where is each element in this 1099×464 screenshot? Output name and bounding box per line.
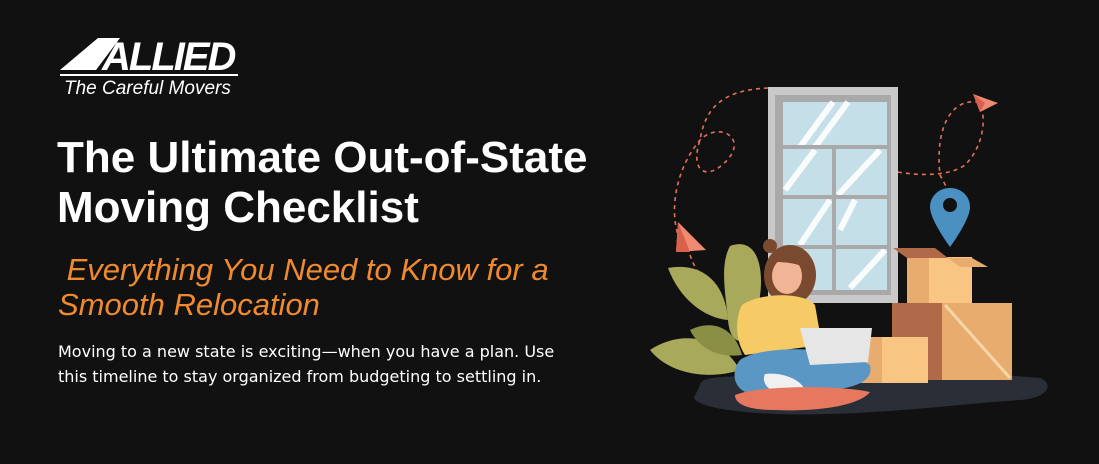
window [768, 87, 898, 303]
intro text: Moving to a new state is exciting—when you have a plan. Use [58, 342, 554, 361]
dashed flight paths [674, 88, 983, 290]
paper plane right [973, 94, 998, 112]
title: Moving Checklist [57, 183, 419, 232]
logo [60, 35, 238, 98]
subtitle [58, 252, 549, 322]
title: The Ultimate Out-of-State [57, 133, 587, 182]
boxes [857, 248, 1012, 383]
intro text [58, 342, 554, 386]
plant leaves [650, 244, 761, 375]
subtitle: Everything You Need to Know for a [67, 252, 549, 287]
logo mark swoosh [60, 38, 120, 70]
logo wordmark: ALLIED [101, 35, 236, 79]
title [57, 133, 587, 232]
location pin [930, 188, 970, 247]
subtitle: Smooth Relocation [58, 287, 320, 322]
intro text: this timeline to stay organized from budgeting to settling in. [58, 367, 541, 386]
floor shadow [694, 374, 1048, 414]
illustration [650, 87, 1048, 414]
paper plane left [676, 222, 706, 252]
woman [735, 239, 872, 410]
